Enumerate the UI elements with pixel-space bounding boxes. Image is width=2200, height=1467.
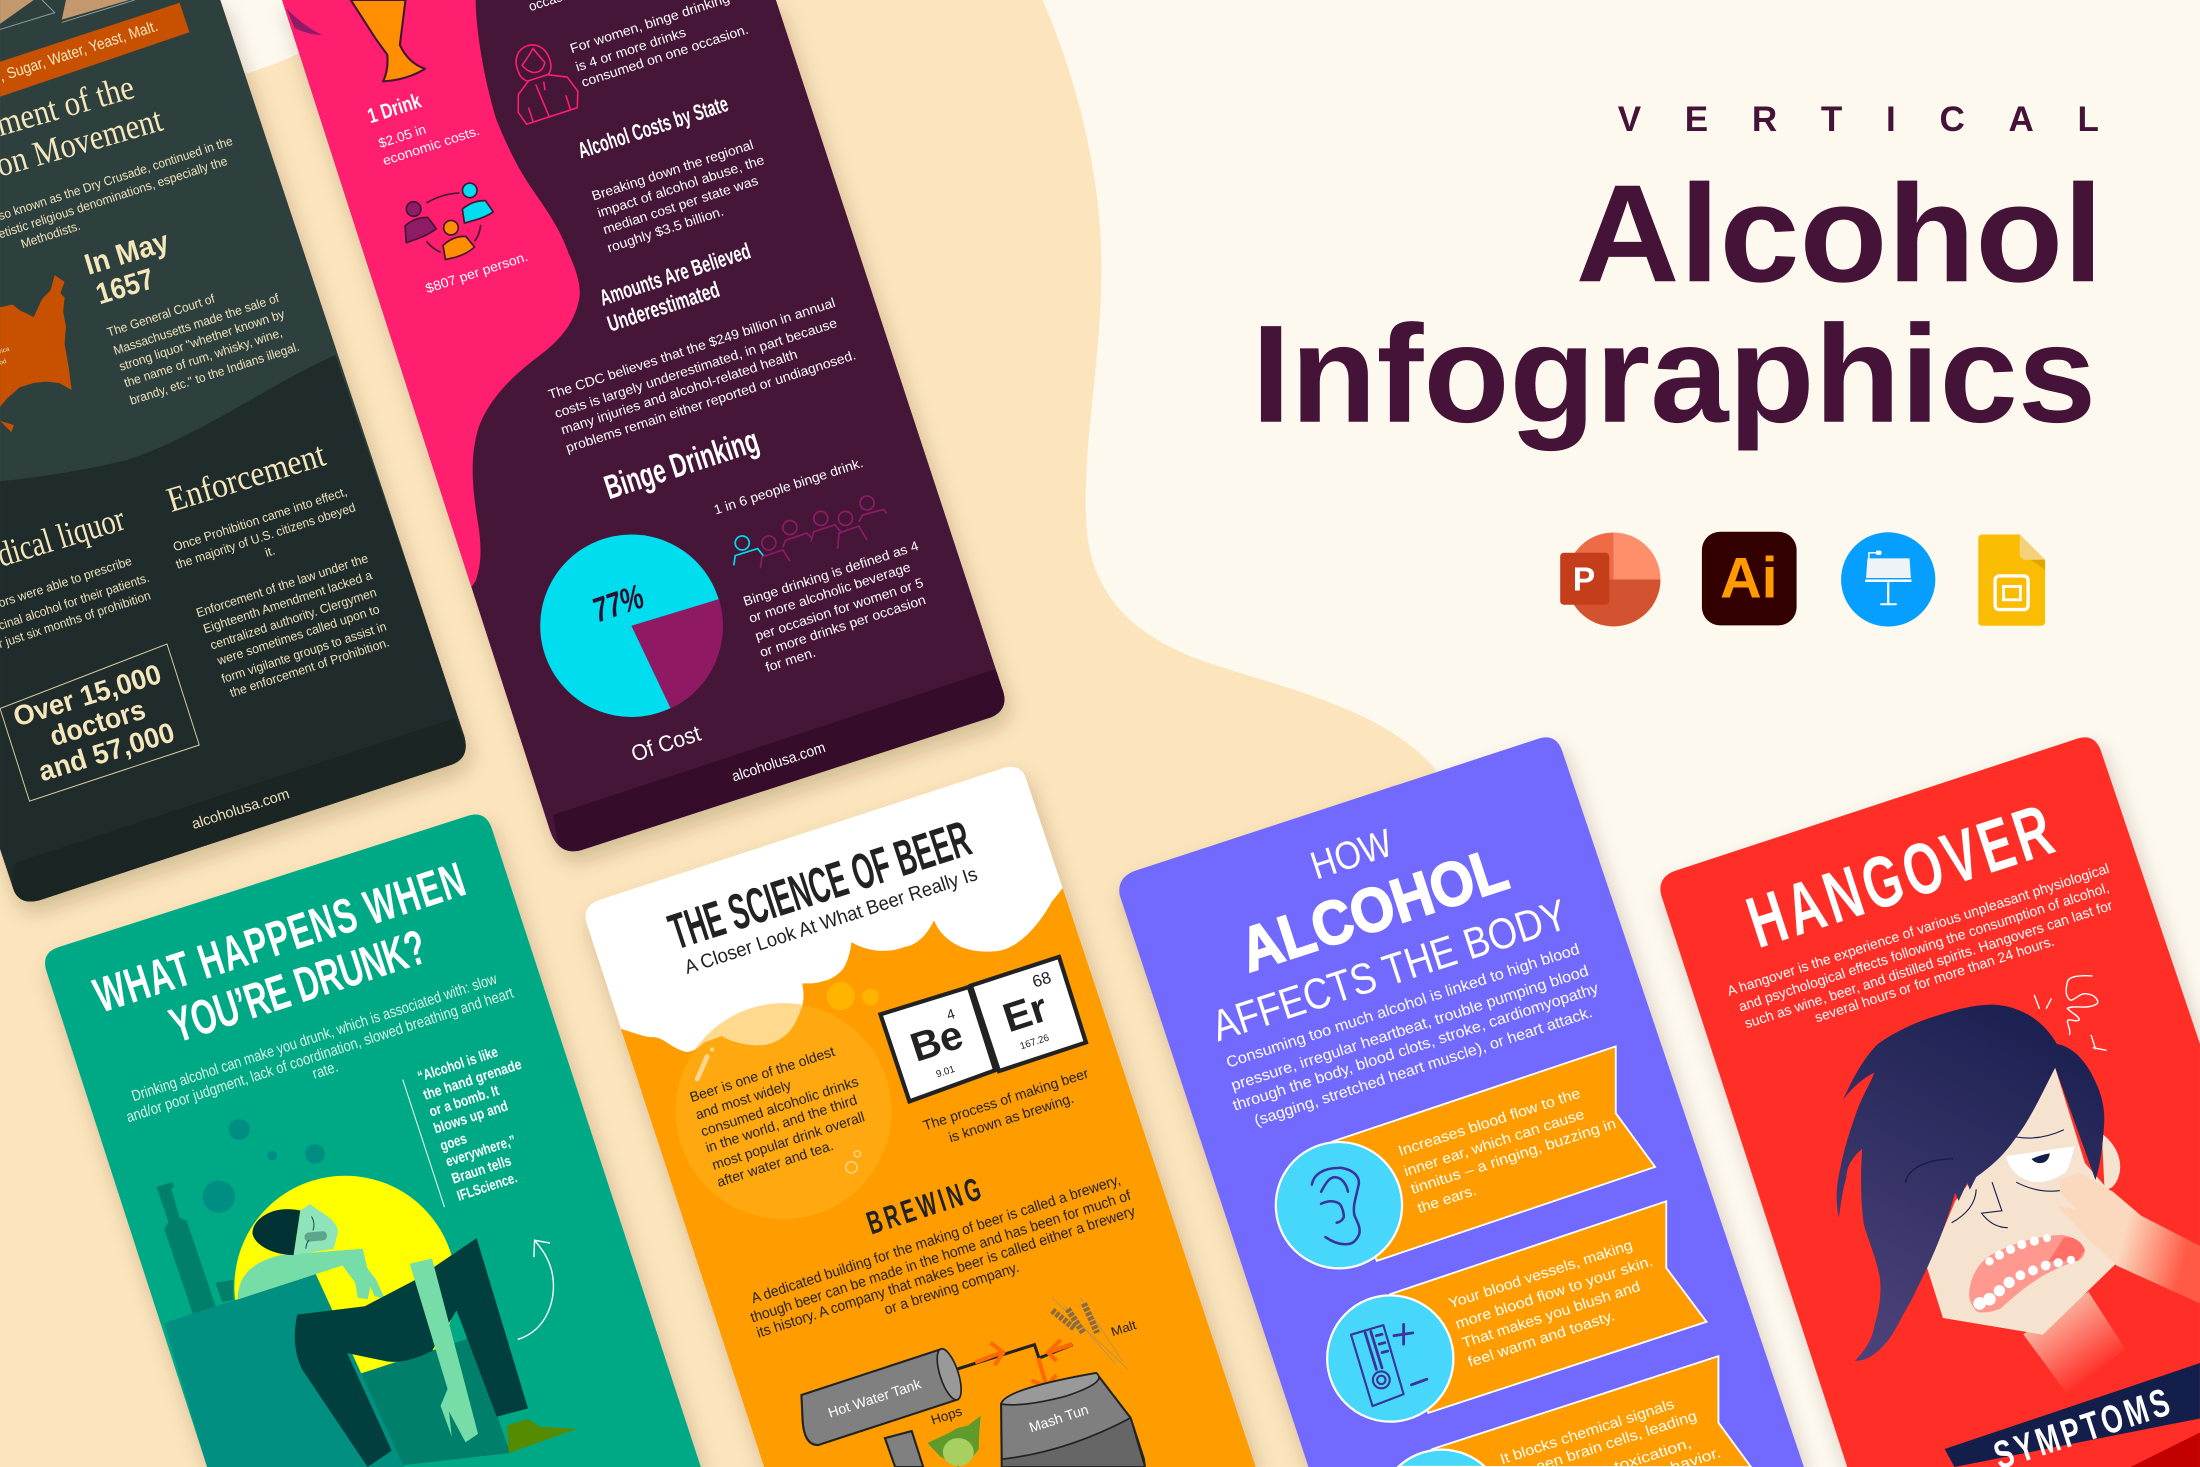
intro text: several hours or for more than 24 hours. [1813,933,2056,1025]
card content [575,751,1145,1467]
text: per person: $807 per person. [424,249,530,296]
heading: in may 1657: In May [81,225,173,282]
element tile: er: Er [997,984,1053,1041]
element tile: be: 9.01 [935,1064,956,1080]
ribbon: temperature [1327,1201,1707,1422]
app icons [1560,532,2045,627]
footer band [553,669,1024,859]
text: brewery: though beer can be made in the home and has been for much of [749,1188,1134,1326]
heading: THE SCIENCE OF BEER [662,809,977,960]
heading: enforcement: Enforcement [162,435,330,520]
icon: illustrator [1702,532,1797,625]
element tile: be: 4 [944,1005,957,1023]
intro text: Drinking alcohol can make you drunk, which is associated with: slow [130,970,500,1105]
text: enforcement: Eighteenth Amendment lacked a [201,568,375,636]
ribbon: ear [1276,1046,1655,1268]
text: bubble: Beer is one of the oldest [688,1043,837,1105]
heading: YOU’RE DRUNK? [163,918,433,1053]
text: enforcement: the enforcement of Prohibition. [228,635,391,700]
symptoms banner [1945,1363,2200,1467]
ribbon: temperature: more blood flow to your skin. [1454,1254,1655,1333]
background blob [0,0,1459,1467]
text: brewing process: The process of making beer [921,1065,1091,1133]
heading [1206,821,1573,1051]
text: medical liquor: r just six months of prohibition [0,589,152,651]
title: alcohol: Alcohol [1576,156,2103,311]
panel: dark green prohibition infographic [0,0,477,912]
card background [45,814,701,1467]
subheading: A Closer Look At What Beer Really Is [682,863,980,979]
table [164,1274,404,1467]
chart: pie 77 percent: 77% [590,576,647,630]
text: brewery: A dedicated building for the making of beer is called a brewery, [749,1172,1123,1307]
card content [1206,821,1751,1467]
quote: “Alcohol is like [416,1045,500,1086]
card content [282,0,1024,859]
quote [416,1045,524,1205]
divider [403,1079,445,1207]
text: for women: consumed on one occasion. [579,22,750,90]
ear [2102,1134,2120,1190]
lower section [0,355,477,912]
nose and eyes [304,1216,327,1249]
mouth [1969,1234,2085,1312]
intro text: Consuming too much alcohol is linked to high blood [1224,941,1582,1072]
text: general court: The General Court of [105,291,217,340]
text: one drink: economic costs. [381,123,481,168]
text: one drink: 1 Drink [365,89,424,128]
intro text: A hangover is the experience of various unpleasant physiological [1725,860,2111,999]
panel: how alcohol affects the body [1119,737,1804,1467]
text: bubble: and most widely [693,1076,793,1122]
heading: HOW [1305,821,1398,888]
text: enforcement: centralized authority. Clergymen [208,585,378,652]
text: medical liquor: cinal alcohol for their patients. [0,571,151,633]
forearm [410,1259,478,1442]
text: general court: brandy, etc." to the Indians illegal. [128,340,301,408]
quote: IFLScience. [455,1170,519,1205]
quote: the hand grenade [421,1057,524,1104]
large bubble [676,1003,892,1219]
card background [585,767,1256,1467]
icon: keynote [1841,532,1935,627]
quote: Braun tells [450,1153,513,1188]
quote: blows up and [432,1098,510,1137]
icon: powerpoint [1560,532,1661,626]
intro text: and/or poor judgment, lack of coordination, slowed breathing and heart [124,984,516,1126]
text: bubble: in the world, and the third [704,1091,859,1155]
text: bubble [688,1043,867,1190]
callout: doctors: doctors [46,694,149,752]
heading: HANGOVER [1738,790,2063,964]
text: binge definition: or more alcoholic beverage [747,559,912,626]
title block [1252,100,2103,452]
text: brewing process: is known as brewing. [947,1090,1076,1145]
text: regional cost [590,137,766,255]
photo thumbnails [0,0,135,29]
ribbon: temperature: feel warm and toasty. [1466,1308,1617,1371]
arrow [518,1240,553,1339]
text: for women [527,0,750,90]
diagram: hot water tank [801,1346,966,1445]
arm [238,1249,384,1299]
text: 1 in 6: 1 in 6 people binge drink. [712,455,865,517]
hair strand [1905,1159,1953,1183]
text: enforcement: form vigilante groups to assist in [220,619,388,686]
intro text: pressure, irregular heartbeat, trouble pumping blood [1229,963,1591,1095]
callout: doctors: and 57,000 [35,717,178,787]
ribbon: brain signals: It blocks chemical signals [1498,1397,1676,1467]
intro text: (sagging, stretched heart muscle), or heart attack. [1252,1004,1595,1130]
intro text: such as wine, beer, and distilled spirits. Hangovers can last for [1742,897,2115,1031]
kicker: vertical: VERTICAL [1618,100,2099,139]
diagram: malt: Malt [1109,1318,1139,1339]
heading: in may 1657: 1657 [92,262,158,311]
text: general court: the name of rum, whisky, wine, [122,326,284,390]
panel: pink and purple cost infographic [282,0,1024,859]
intro text: Methodists. [19,219,82,251]
panel: hangover [1660,737,2200,1467]
quote: or a bomb. It [427,1083,501,1121]
text: bubble: most popular drink overall [710,1108,867,1173]
text: regional cost: roughly $3.5 billion. [605,204,726,255]
callout: doctors [0,644,199,801]
neck [2023,1292,2125,1394]
heading: underestimated [596,238,754,337]
card content [1725,790,2200,1467]
text: of cost: Of Cost [628,720,704,767]
small bubbles and highlights [697,982,879,1173]
text: regional cost: impact of alcohol abuse, the [595,152,766,220]
chart: pie 77 percent [540,535,723,717]
text: bubble: after water and tea. [715,1137,835,1190]
text: enforcement: it. [263,544,277,560]
hair [253,1209,300,1255]
icon: row of people [734,496,887,568]
element tile: be [880,987,995,1101]
intro text [1224,941,1601,1130]
ribbon: temperature: That makes you blush and [1460,1279,1642,1352]
text: general court [105,291,301,408]
quote: goes [438,1131,469,1155]
text: enforcement: Once Prohibition came into effect, [171,485,349,554]
text: cdc: problems remain either reported or undiagnosed. [564,347,858,455]
card background [1119,737,1804,1467]
intro text: and psychological effects following the consumption of alcohol, [1736,879,2111,1014]
card background [1660,737,2200,1467]
icon: illustrator: Ai [1720,547,1778,611]
illustration: bottle [156,1182,216,1316]
text: general court: Massachusetts made the sale of [112,291,281,358]
element tile: er [971,957,1086,1071]
heading: binge drinking: Binge Drinking [600,422,764,507]
text: for women: is 4 or more drinks [574,24,688,74]
heading: WHAT HAPPENS WHEN [87,851,472,1023]
heading: in may 1657 [84,234,166,304]
text: binge definition: per occasion for women or 5 [753,575,925,644]
heading: AFFECTS THE BODY [1206,891,1573,1051]
heading: ALCOHOL [1232,835,1516,986]
ingredients banner: , Sugar, Water, Yeast, Malt. [0,18,160,85]
text: enforcement: the majority of U.S. citizens obeyed [174,500,357,572]
text: binge definition [741,538,928,675]
diagram: hops: Hops [929,1403,964,1428]
diagram: hot water tank: Hot Water Tank [826,1375,924,1421]
quote: everywhere,” [444,1133,518,1171]
text: brewery: its history. A company that makes beer is called either a brewery [755,1203,1138,1342]
illustration: bubbles [203,1119,325,1213]
card content [87,851,577,1467]
card background [0,0,466,902]
text: cdc: many injuries and alcohol-related health [559,347,799,437]
illustration: yellow sun [234,1176,456,1397]
illustration: drunk person [164,1204,577,1467]
footer url: alcoholusa.com [190,786,292,833]
seat [358,1338,510,1467]
element tile: er: 68 [1030,968,1054,992]
text: one drink [368,94,480,165]
heading: underestimated: Amounts Are Believed [596,238,754,311]
eye [1952,1130,2074,1228]
icon: people circle [405,183,493,260]
text: binge definition: Binge drinking is defined as 4 [741,538,921,609]
text: regional cost: Breaking down the regional [590,137,755,203]
intro text: through the body, blood clots, stroke, cardiomyopathy [1231,980,1601,1115]
pain scribble [2034,976,2106,1050]
text: bubble: consumed alcoholic drinks [699,1073,860,1139]
panel: what happens when you're drunk [45,814,701,1467]
map of america [0,275,72,432]
icon: google slides [1978,535,2045,626]
heading: alcohol costs by state: Alcohol Costs by State [575,91,731,163]
text: regional cost: median cost per state was [601,173,760,237]
text: one drink: $2.05 in [377,122,428,151]
legs [295,1238,528,1467]
text: general court: strong liquor "whether known by [117,307,287,374]
intro text: so known as the Dry Crusade, continued in the [0,134,234,223]
element tile: be: Be [905,1011,968,1071]
footer url: alcoholusa.com [730,740,828,785]
footer band [12,744,466,902]
ribbon: ear: tinnitus – a ringing, buzzing in [1409,1116,1618,1198]
text: enforcement: were sometimes called upon to [215,602,381,668]
shoe [507,1419,577,1453]
text: enforcement: Enforcement of the law under the [194,551,370,620]
foam [575,751,1065,1052]
heading: brewing: BREWING [862,1171,985,1242]
head [294,1204,338,1255]
text: cdc: costs is largely underestimated, in part because [553,315,839,421]
ribbon: temperature: Your blood vessels, making [1447,1238,1635,1312]
card background [282,0,1004,851]
element tile: er: 167.26 [1019,1032,1051,1052]
ribbon: ear: inner ear, which can cause [1402,1107,1587,1180]
panel: the science of beer [575,751,1256,1467]
text: medical liquor [0,554,152,651]
text: enforcement [171,485,391,700]
diagram: hops [927,1403,981,1467]
intro text: etistic religious denominations, especially the [0,154,229,241]
pink wave area [282,0,580,589]
icon: beer glass [351,0,425,81]
ribbon: ear: the ears. [1416,1183,1479,1217]
diagram: mash tun [1001,1373,1145,1467]
ribbon: ear: Increases blood flow to the [1397,1086,1582,1160]
hair [1837,1005,2104,1361]
text: cdc [546,295,858,455]
intro text: rate. [310,1058,340,1083]
decorative leaf [286,8,323,35]
ribbon: brain signals [1398,1356,1751,1467]
text: brewery: or a brewing company. [882,1260,1021,1318]
text: medical liquor: ors were able to prescribe [0,554,134,610]
diagram: small cylinder [885,1431,923,1467]
hand [2057,1173,2200,1303]
face [1927,1068,2116,1335]
heading: underestimated: Underestimated [604,277,723,337]
text: binge definition: or more drinks per occasion [758,592,928,660]
icon: woman [515,44,579,125]
callout: doctors: Over 15,000 [10,658,165,733]
icon: powerpoint: P [1573,562,1595,599]
card content [0,0,477,912]
heading: prohibition movement [0,80,164,176]
illustration: shot glass [215,1280,233,1302]
diagram: malt [1052,1298,1139,1369]
diagram: mash tun: Mash Tun [1027,1401,1090,1435]
title: infographics: Infographics [1252,297,2096,452]
diagram: brewing pipes and arrows [947,1340,1073,1386]
text: cdc: The CDC believes that the $249 billion in annual [546,295,837,402]
text: binge definition: for men. [763,645,818,675]
